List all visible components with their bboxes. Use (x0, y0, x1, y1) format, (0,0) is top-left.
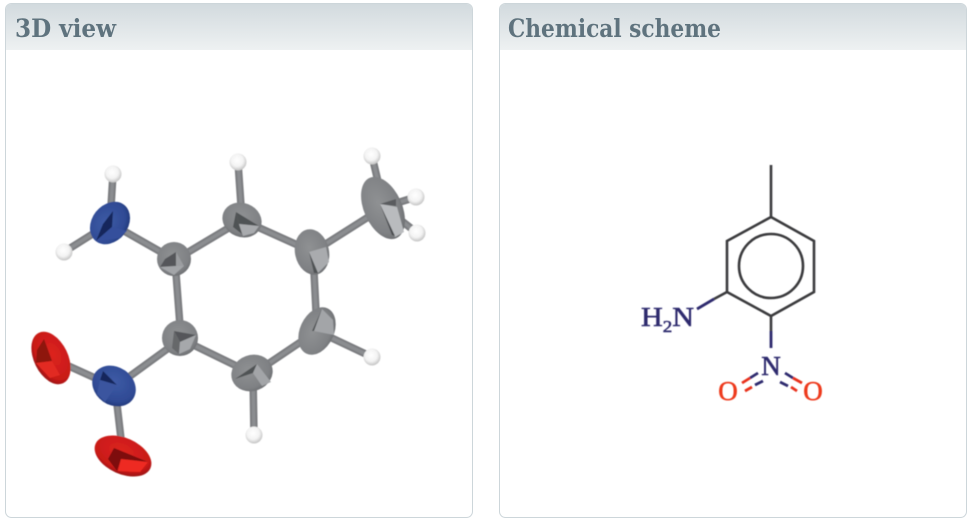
label: H2N: N (672, 302, 694, 332)
heading: Chemical scheme: Chemical scheme (508, 14, 721, 43)
atom: C methyl (352, 170, 414, 246)
benzene ring and methyl (714, 165, 814, 331)
atom: N amine (82, 194, 138, 252)
bonds to nitrogen (697, 299, 793, 386)
label: O left: O (718, 376, 738, 406)
heading: 3D view: 3D view (15, 14, 117, 43)
panel header: 3D view (6, 4, 472, 50)
label: H2N: H (641, 302, 660, 332)
atom: O upper (23, 325, 79, 391)
panel: Chemical scheme (500, 4, 966, 518)
skeletal formula (641, 165, 823, 406)
atom: C3 (226, 349, 278, 397)
label: H2N: 2 (663, 317, 672, 336)
atom: N nitro (84, 357, 144, 415)
atom: C2 (162, 320, 198, 356)
bonds (51, 156, 417, 456)
atom: C4 (291, 301, 343, 361)
atom: C1 (157, 242, 191, 276)
molecule: 3D thermal ellipsoid model (23, 148, 426, 485)
atom: C6 (217, 197, 267, 243)
label: N: N (761, 351, 781, 381)
atom: O lower (88, 427, 158, 485)
panel header: Chemical scheme (500, 4, 966, 50)
hydrogen atoms (56, 148, 426, 444)
label: O right: O (803, 376, 823, 406)
atom: C5 (291, 226, 333, 278)
nitro oxygen double bonds (742, 378, 802, 391)
panel: 3D view (6, 4, 472, 518)
